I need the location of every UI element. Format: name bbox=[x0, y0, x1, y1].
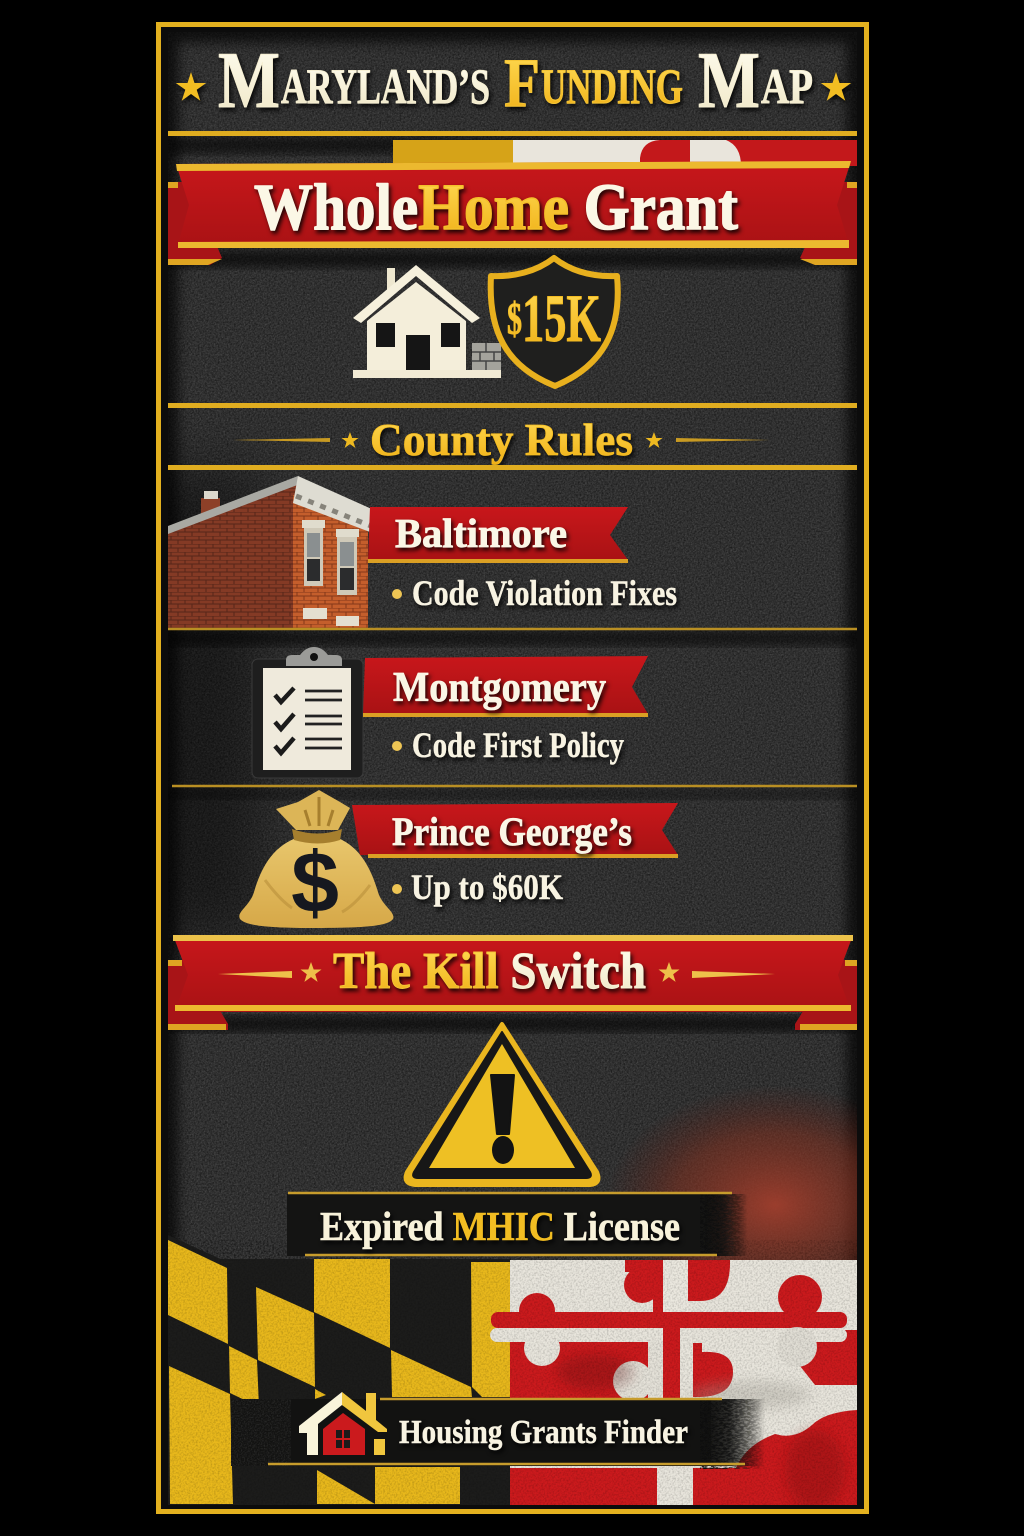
title text: UNDING bbox=[541, 58, 683, 114]
title text bbox=[218, 37, 813, 125]
banner: Prince George's: Prince George’s bbox=[392, 809, 632, 854]
bullet: Code Violation Fixes: Code Violation Fixes bbox=[412, 573, 677, 613]
ornaments bbox=[218, 962, 775, 982]
icon: red house bbox=[299, 1392, 387, 1455]
WholeHome Grant text: WholeHome Grant bbox=[254, 171, 738, 244]
icon: brick building bbox=[168, 476, 374, 628]
red glow behind warning bbox=[623, 1096, 857, 1260]
band: Housing Grants Finder bbox=[268, 1392, 745, 1464]
icon: money bag bbox=[239, 790, 393, 931]
flag: Maryland bbox=[168, 1192, 857, 1505]
divider bbox=[168, 628, 857, 630]
bullet: Up to $60K: Up to $60K bbox=[411, 867, 563, 907]
title text: M bbox=[698, 37, 760, 125]
divider bbox=[168, 131, 857, 136]
flag: gold and black field bbox=[168, 1240, 510, 1504]
banner: The Kill Switch bbox=[168, 935, 857, 1030]
title text: AP bbox=[761, 58, 813, 114]
flag: weathered stains bbox=[557, 1354, 845, 1510]
icon: warning triangle bbox=[406, 1024, 598, 1185]
Housing Grants Finder text: Housing Grants Finder bbox=[399, 1414, 688, 1451]
icon: $15K shield bbox=[491, 258, 618, 386]
banner: Prince George's bbox=[352, 803, 678, 858]
title text: F bbox=[504, 45, 540, 122]
heading: County Rules bbox=[233, 414, 770, 465]
flag: bottony cross bbox=[490, 1260, 847, 1402]
divider bbox=[168, 403, 857, 408]
icon: $15K shield: 15K bbox=[522, 280, 601, 356]
County Rules text: County Rules bbox=[370, 414, 633, 465]
ribbon tails bbox=[168, 960, 857, 1030]
title text: ARYLAND’S bbox=[281, 58, 490, 114]
banner: Baltimore: Baltimore bbox=[395, 510, 567, 556]
gold frame bbox=[158, 24, 866, 1512]
banner: Montgomery: Montgomery bbox=[393, 665, 606, 711]
banner: WholeHome Grant bbox=[168, 161, 857, 265]
icon: clipboard bbox=[252, 647, 363, 778]
bullet: Code First Policy: Code First Policy bbox=[412, 725, 624, 765]
Expired MHIC License text: Expired MHIC License bbox=[320, 1203, 680, 1249]
row: Montgomery bbox=[252, 647, 648, 778]
ribbon body bbox=[176, 161, 851, 248]
icon: money bag: $ bbox=[291, 835, 339, 931]
flag: red and white field bbox=[168, 1240, 857, 1510]
icon: $15K shield: $ bbox=[507, 293, 522, 344]
divider bbox=[172, 785, 857, 787]
title bbox=[176, 37, 851, 125]
flag strip behind banner bbox=[393, 140, 857, 166]
divider bbox=[168, 465, 857, 470]
row: Baltimore bbox=[168, 476, 677, 628]
ribbon body bbox=[173, 935, 853, 1012]
row: Prince George's bbox=[239, 790, 678, 931]
The Kill Switch text: The Kill Switch bbox=[333, 943, 646, 1000]
banner: Baltimore bbox=[368, 507, 628, 563]
panel: asphalt background bbox=[168, 32, 857, 1260]
title text: M bbox=[218, 37, 280, 125]
ribbon tails bbox=[168, 182, 857, 265]
band: Expired MHIC License bbox=[287, 1193, 748, 1256]
title stars bbox=[176, 72, 851, 101]
icon: house bbox=[353, 265, 501, 378]
footer band: dark strip bbox=[231, 1399, 765, 1469]
banner: Montgomery bbox=[363, 656, 648, 717]
frame edge bbox=[158, 24, 866, 1512]
